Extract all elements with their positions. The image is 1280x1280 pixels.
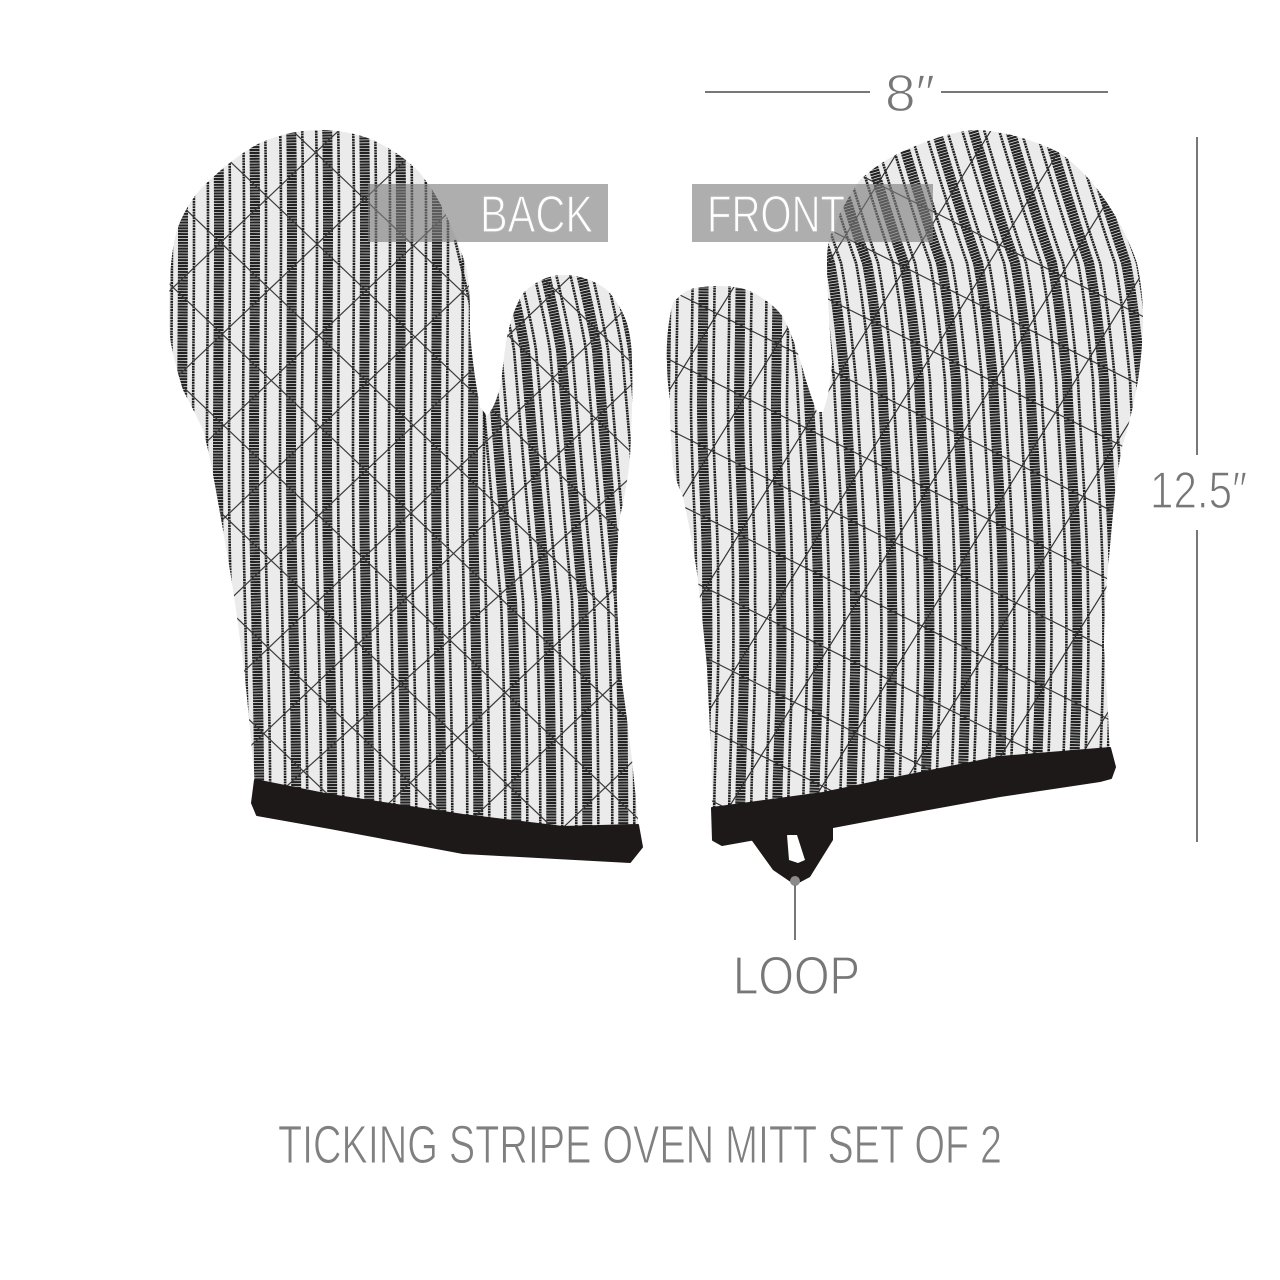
mitt body: front	[666, 130, 1143, 807]
cuff: back	[252, 780, 642, 862]
back oven mitt	[169, 130, 643, 863]
label: back	[368, 184, 608, 244]
label: back: BACK	[480, 186, 593, 244]
label: front: FRONT	[707, 186, 845, 244]
mitt body: back	[169, 130, 638, 826]
hanging loop	[750, 824, 833, 885]
height dimension: 12.5 inches: 12.5″	[1150, 462, 1247, 520]
width dimension: 8 inches: 8″	[885, 65, 935, 123]
callout: loop: LOOP	[733, 946, 860, 1006]
cuff: front	[712, 748, 1115, 845]
infographic canvas	[169, 75, 1246, 1163]
title: TICKING STRIPE OVEN MITT SET OF 2	[278, 1115, 1002, 1175]
callout: loop	[733, 876, 860, 1006]
front oven mitt	[666, 130, 1143, 882]
